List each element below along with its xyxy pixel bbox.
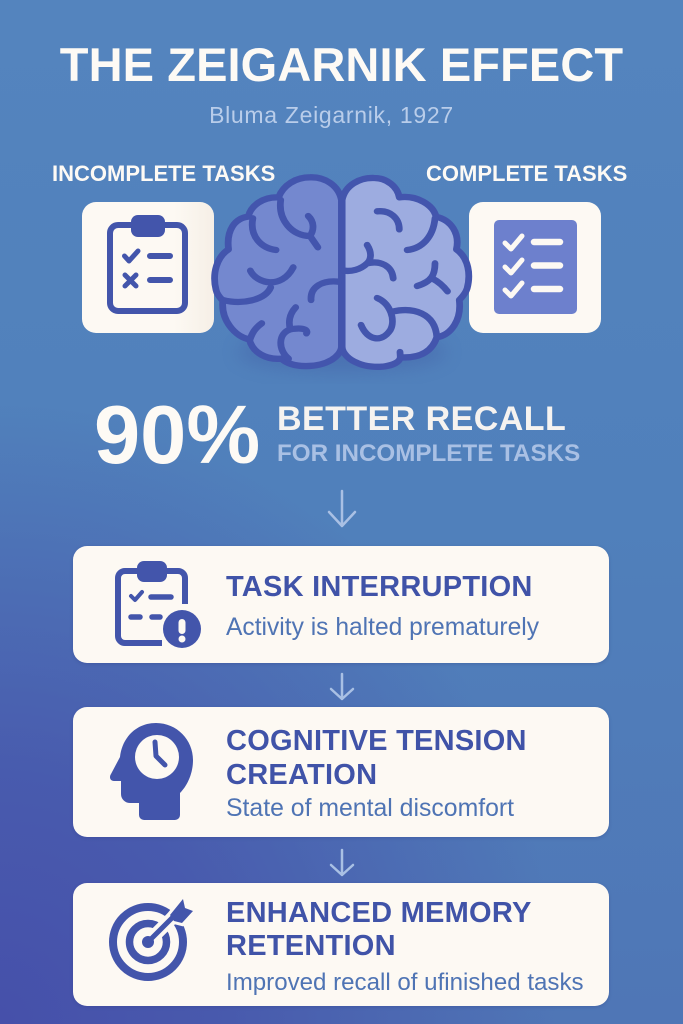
card: incomplete tasks (82, 202, 214, 333)
stat sublabel: for incomplete tasks: FOR INCOMPLETE TASKS (277, 440, 580, 467)
label: incomplete tasks: INCOMPLETE TASKS (52, 161, 275, 186)
right hemisphere folds (344, 211, 447, 357)
heading: ENHANCED MEMORY RETENTION (226, 897, 531, 962)
arrow 1 (328, 490, 356, 528)
icon: clipboard with check and cross (107, 215, 188, 314)
description: State of mental discomfort (226, 795, 514, 822)
right hemisphere (342, 178, 469, 367)
icon: head with clock (110, 723, 193, 820)
arrow 2 (330, 672, 354, 700)
panel: task interruption (73, 546, 609, 663)
icon: completed checklist (494, 220, 577, 314)
heading: COGNITIVE TENSION CREATION (226, 725, 527, 791)
left hemisphere (215, 177, 341, 366)
heading: TASK INTERRUPTION (226, 571, 533, 603)
subtitle: Bluma Zeigarnik, 1927 (209, 102, 454, 128)
left hemisphere folds (223, 200, 339, 359)
icon: target with arrow (109, 899, 193, 981)
label: complete tasks: COMPLETE TASKS (426, 161, 627, 186)
card: complete tasks (469, 202, 601, 333)
title: THE ZEIGARNIK EFFECT (60, 38, 623, 91)
panel: cognitive tension creation (73, 707, 609, 837)
description: Activity is halted prematurely (226, 614, 539, 641)
stat label: better recall: BETTER RECALL (277, 400, 566, 438)
arrow 3 (330, 848, 354, 876)
panel: enhanced memory retention (73, 883, 609, 1006)
stat: 90 percent: 90% (94, 388, 260, 481)
icon: clipboard with alert (115, 561, 201, 648)
description: Improved recall of ufinished tasks (226, 969, 584, 996)
